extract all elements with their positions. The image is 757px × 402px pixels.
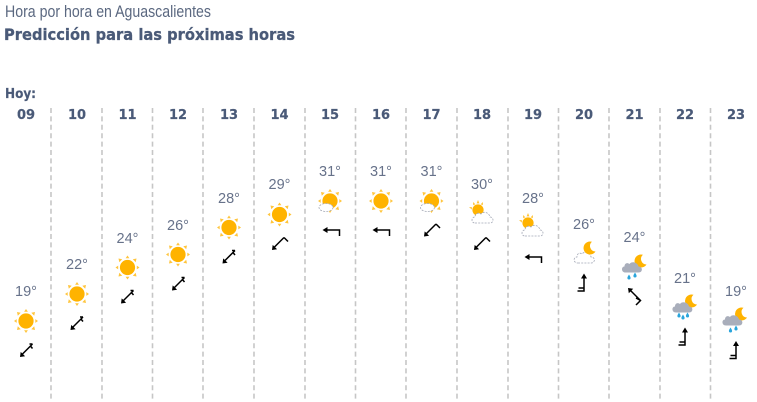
column: 19h: 19 <box>524 108 542 123</box>
column: 13h: 28° <box>218 191 240 207</box>
column: 12h: 12 <box>169 108 187 123</box>
column: 17h: 31° <box>421 164 442 180</box>
column: 17h: 17 <box>422 108 441 123</box>
column: 22h: 22 <box>676 108 694 123</box>
column: 16h: 31° <box>370 164 392 180</box>
subtitle: Hora por hora en Aguascalientes <box>5 3 211 21</box>
column: 20h: 26° <box>573 217 595 233</box>
today label: Hoy: <box>5 87 36 102</box>
column: 15h <box>318 108 342 236</box>
column: 16h <box>369 108 393 236</box>
column: 15h: 31° <box>319 164 341 180</box>
column: 13h: 13 <box>220 108 238 123</box>
column: 12h: 26° <box>167 218 189 234</box>
column: 09h <box>14 108 38 357</box>
column: 09h: 09 <box>17 108 35 123</box>
column: 19h: 28° <box>522 191 544 207</box>
column: 22h <box>672 108 697 345</box>
column: 11h: 24° <box>117 231 138 247</box>
column: 14h: 29° <box>269 177 290 193</box>
column: 10h <box>65 108 89 330</box>
column: 12h <box>166 108 190 290</box>
column: 18h: 30° <box>471 177 493 193</box>
column: 23h: 19° <box>725 284 747 300</box>
column: 20h <box>573 108 596 291</box>
column: 14h <box>268 108 292 250</box>
column: 10h: 10 <box>68 108 86 123</box>
title: Predicción para las próximas horas <box>4 25 295 44</box>
column: 18h: 18 <box>473 108 491 123</box>
column: 19h <box>519 108 544 263</box>
column: 15h: 15 <box>321 108 339 123</box>
column: 21h <box>622 108 646 305</box>
column: 21h: 24° <box>624 230 645 246</box>
column: 23h <box>722 108 747 358</box>
column: 21h: 21 <box>625 108 644 123</box>
column: 11h: 11 <box>118 108 137 123</box>
column: 22h: 21° <box>674 271 696 287</box>
column: 18h <box>469 108 493 250</box>
column: 17h <box>420 108 444 236</box>
column: 16h: 16 <box>372 108 390 123</box>
column: 11h <box>116 108 140 304</box>
column: 13h <box>217 108 241 264</box>
column: 23h: 23 <box>727 108 745 123</box>
column: 09h: 19° <box>15 284 37 300</box>
column: 20h: 20 <box>575 108 593 123</box>
column: 14h: 14 <box>270 108 289 123</box>
column: 10h: 22° <box>66 257 88 273</box>
